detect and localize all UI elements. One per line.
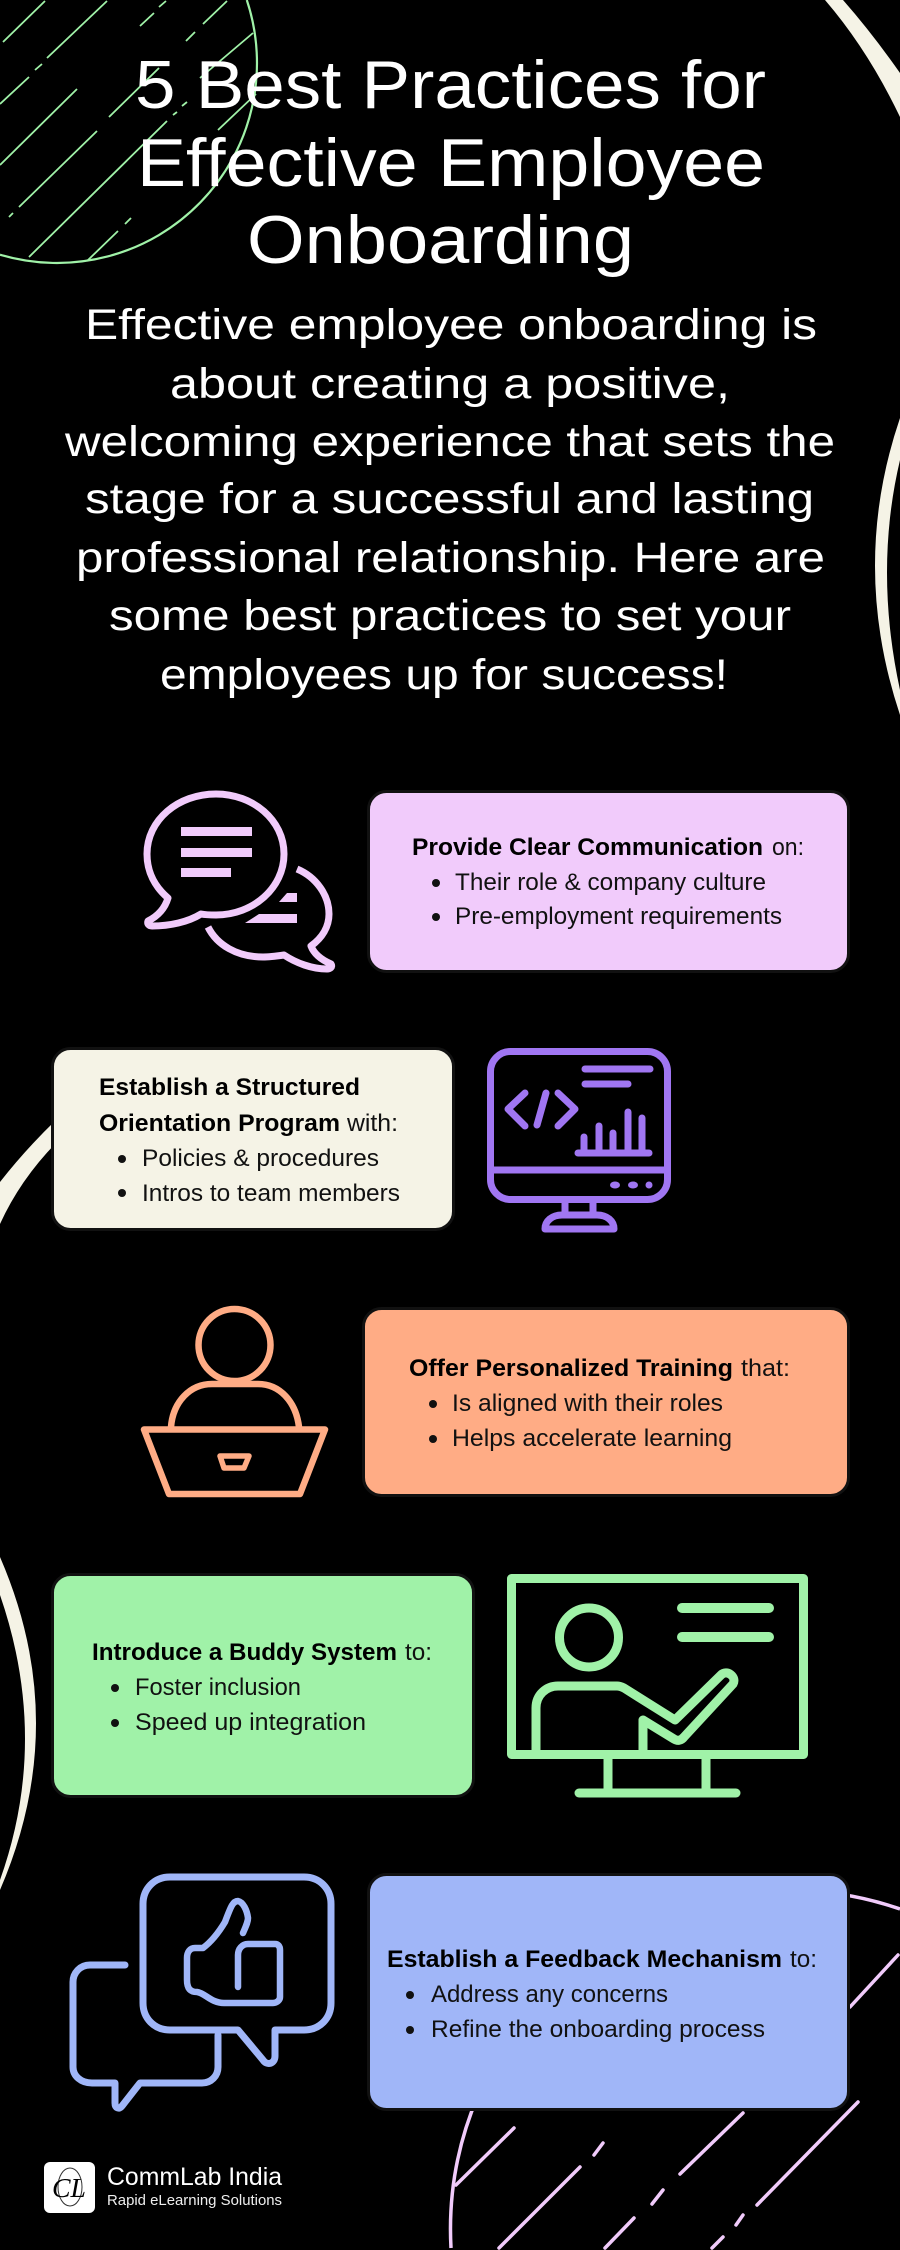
decoration: cream arc left lower <box>0 1557 36 1890</box>
bullet list: Is aligned with their roles <box>452 1390 723 1417</box>
title: 5 Best Practices for <box>135 47 766 123</box>
heading: with: <box>346 1110 398 1137</box>
heading <box>99 1074 398 1137</box>
card background <box>368 1874 848 2110</box>
heading: Establish a Structured <box>99 1074 360 1101</box>
heading: Introduce a Buddy System <box>92 1639 397 1666</box>
bullet list <box>118 1145 400 1207</box>
card background <box>52 1048 454 1230</box>
bullet list: Policies & procedures <box>142 1145 379 1172</box>
card background <box>368 792 848 972</box>
bullet list: Foster inclusion <box>135 1674 301 1701</box>
icon: presenter at screen <box>512 1578 804 1793</box>
intro paragraph: employees up for success! <box>160 651 728 699</box>
panel: personalized training <box>364 1308 848 1496</box>
icon: person at laptop <box>144 1309 325 1494</box>
logo wordmark: CommLab India <box>107 2163 282 2191</box>
intro paragraph: some best practices to set your <box>109 592 791 640</box>
bullet list: Refine the onboarding process <box>431 2016 765 2043</box>
logo tagline: Rapid eLearning Solutions <box>107 2193 282 2209</box>
title <box>135 47 766 278</box>
icon: monitor with code and chart <box>490 1052 668 1229</box>
intro paragraph: welcoming experience that sets the <box>64 418 835 466</box>
bullet list: Helps accelerate learning <box>452 1425 732 1452</box>
icon: chat bubbles <box>147 794 332 969</box>
logo mark: CL <box>52 2173 86 2203</box>
bullet list: Speed up integration <box>135 1709 366 1736</box>
panel: clear communication <box>368 792 848 972</box>
heading: to: <box>405 1639 432 1666</box>
heading: Offer Personalized Training <box>409 1355 733 1382</box>
heading: Orientation Program <box>99 1110 340 1137</box>
intro paragraph: Effective employee onboarding is <box>85 301 817 349</box>
panel: structured orientation <box>52 1048 454 1230</box>
logo: CommLab India <box>44 2162 282 2213</box>
decoration: cream arc left upper <box>0 1120 56 1224</box>
decoration: green hatched circle <box>0 0 257 263</box>
card background <box>364 1308 848 1496</box>
bullet list: Their role & company culture <box>455 869 766 896</box>
title: Effective Employee <box>137 125 765 201</box>
decoration: cream arc top right <box>825 0 900 117</box>
heading: that: <box>741 1355 790 1382</box>
heading: Establish a Feedback Mechanism <box>387 1946 782 1973</box>
card background <box>52 1574 474 1796</box>
bullet list: Intros to team members <box>142 1180 400 1207</box>
bullet list: Address any concerns <box>431 1981 668 2008</box>
intro paragraph: about creating a positive, <box>170 360 730 408</box>
bullet list <box>406 1981 765 2043</box>
intro paragraph: professional relationship. Here are <box>76 534 825 582</box>
intro paragraph: stage for a successful and lasting <box>85 475 814 523</box>
panel: buddy system <box>52 1574 474 1796</box>
heading: on: <box>772 834 804 861</box>
bullet list <box>432 869 782 930</box>
icon: thumbs up speech bubbles <box>73 1877 331 2108</box>
decoration: pink hatched circle <box>450 1890 900 2248</box>
panel: feedback mechanism <box>368 1874 848 2110</box>
intro paragraph <box>64 301 835 699</box>
decoration: cream arc right middle <box>875 418 900 715</box>
bullet list <box>429 1390 732 1452</box>
bullet list <box>111 1674 366 1736</box>
logo mark <box>44 2162 95 2213</box>
bullet list: Pre-employment requirements <box>455 903 782 930</box>
heading: Provide Clear Communication <box>412 834 763 861</box>
heading: to: <box>790 1946 817 1973</box>
title: Onboarding <box>247 202 634 278</box>
